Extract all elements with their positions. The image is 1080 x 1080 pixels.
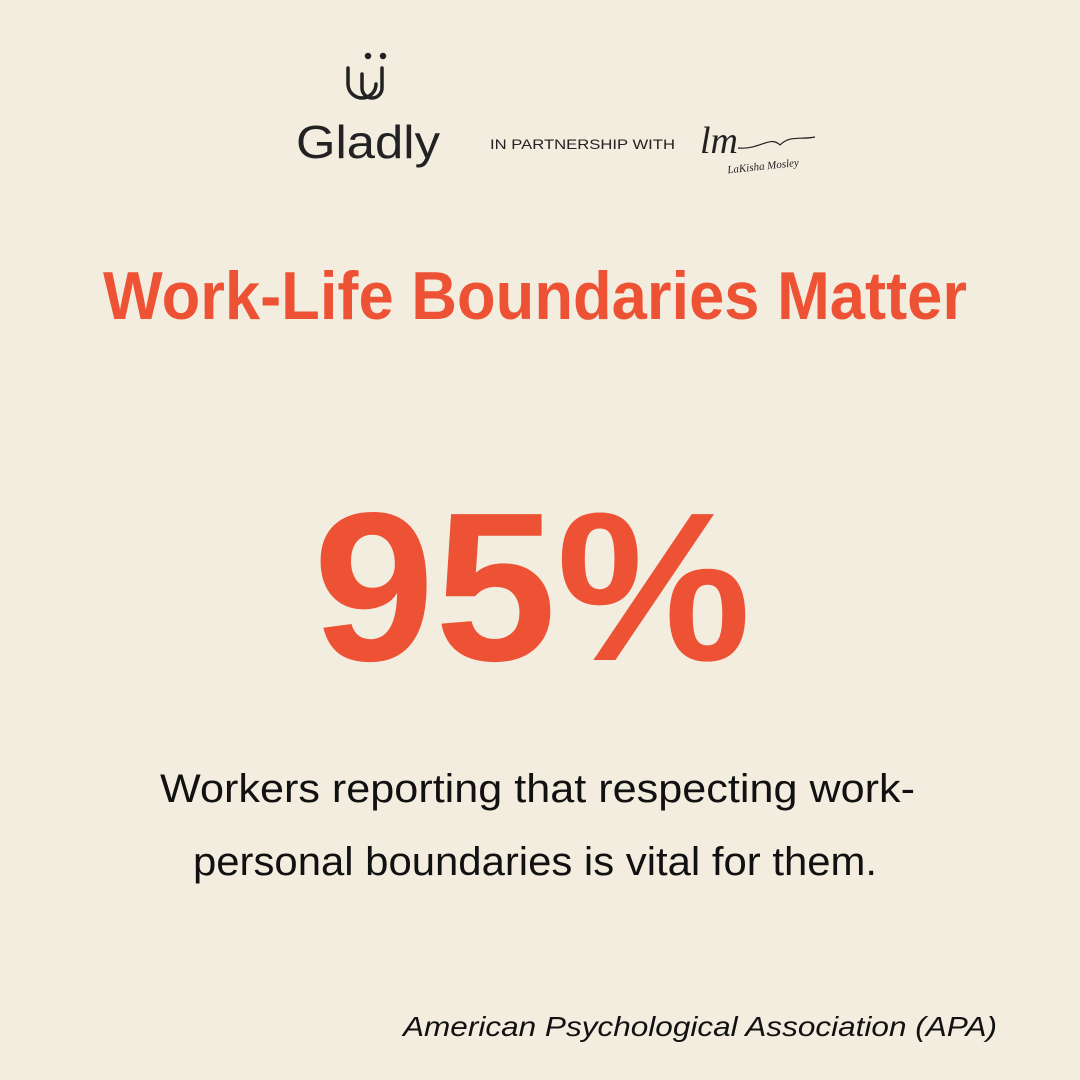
- icon: gladly logo: [348, 54, 384, 98]
- description: personal boundaries is vital for them.: [193, 840, 877, 884]
- partner logo: LaKisha Mosley: LaKisha Mosley: [726, 157, 800, 177]
- source: American Psychological Association (APA): [401, 1011, 997, 1042]
- description: Workers reporting that respecting work-: [160, 767, 915, 811]
- partner logo: LaKisha Mosley: [700, 120, 815, 177]
- description: [160, 767, 915, 884]
- header logos: [296, 54, 815, 177]
- big stat: 95%: [313, 468, 751, 705]
- partnership text: IN PARTNERSHIP WITH: [490, 136, 675, 152]
- partner logo: LaKisha Mosley: lm: [700, 120, 738, 162]
- title: Work-Life Boundaries Matter: [103, 258, 967, 334]
- gladly wordmark: Gladly: [296, 116, 440, 168]
